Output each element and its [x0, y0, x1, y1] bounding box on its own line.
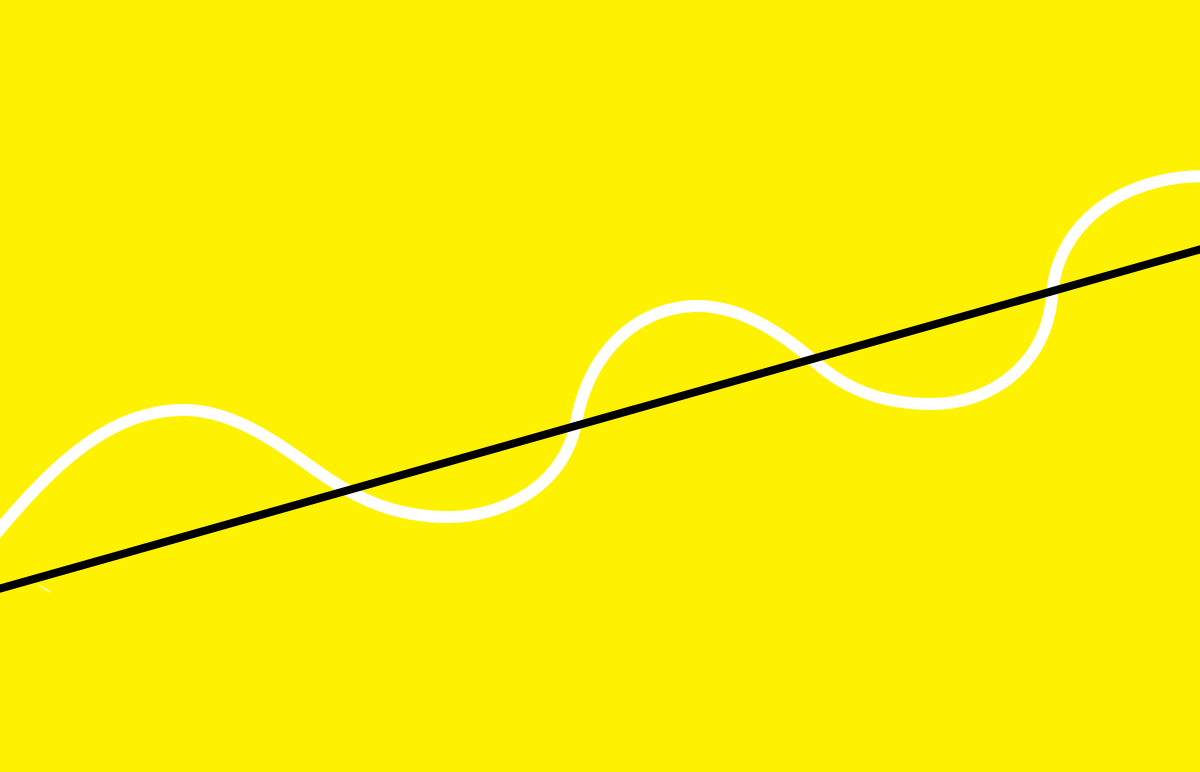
black trend line	[0, 248, 1200, 590]
small white tick	[39, 585, 50, 592]
white wavy curve	[0, 176, 1200, 536]
